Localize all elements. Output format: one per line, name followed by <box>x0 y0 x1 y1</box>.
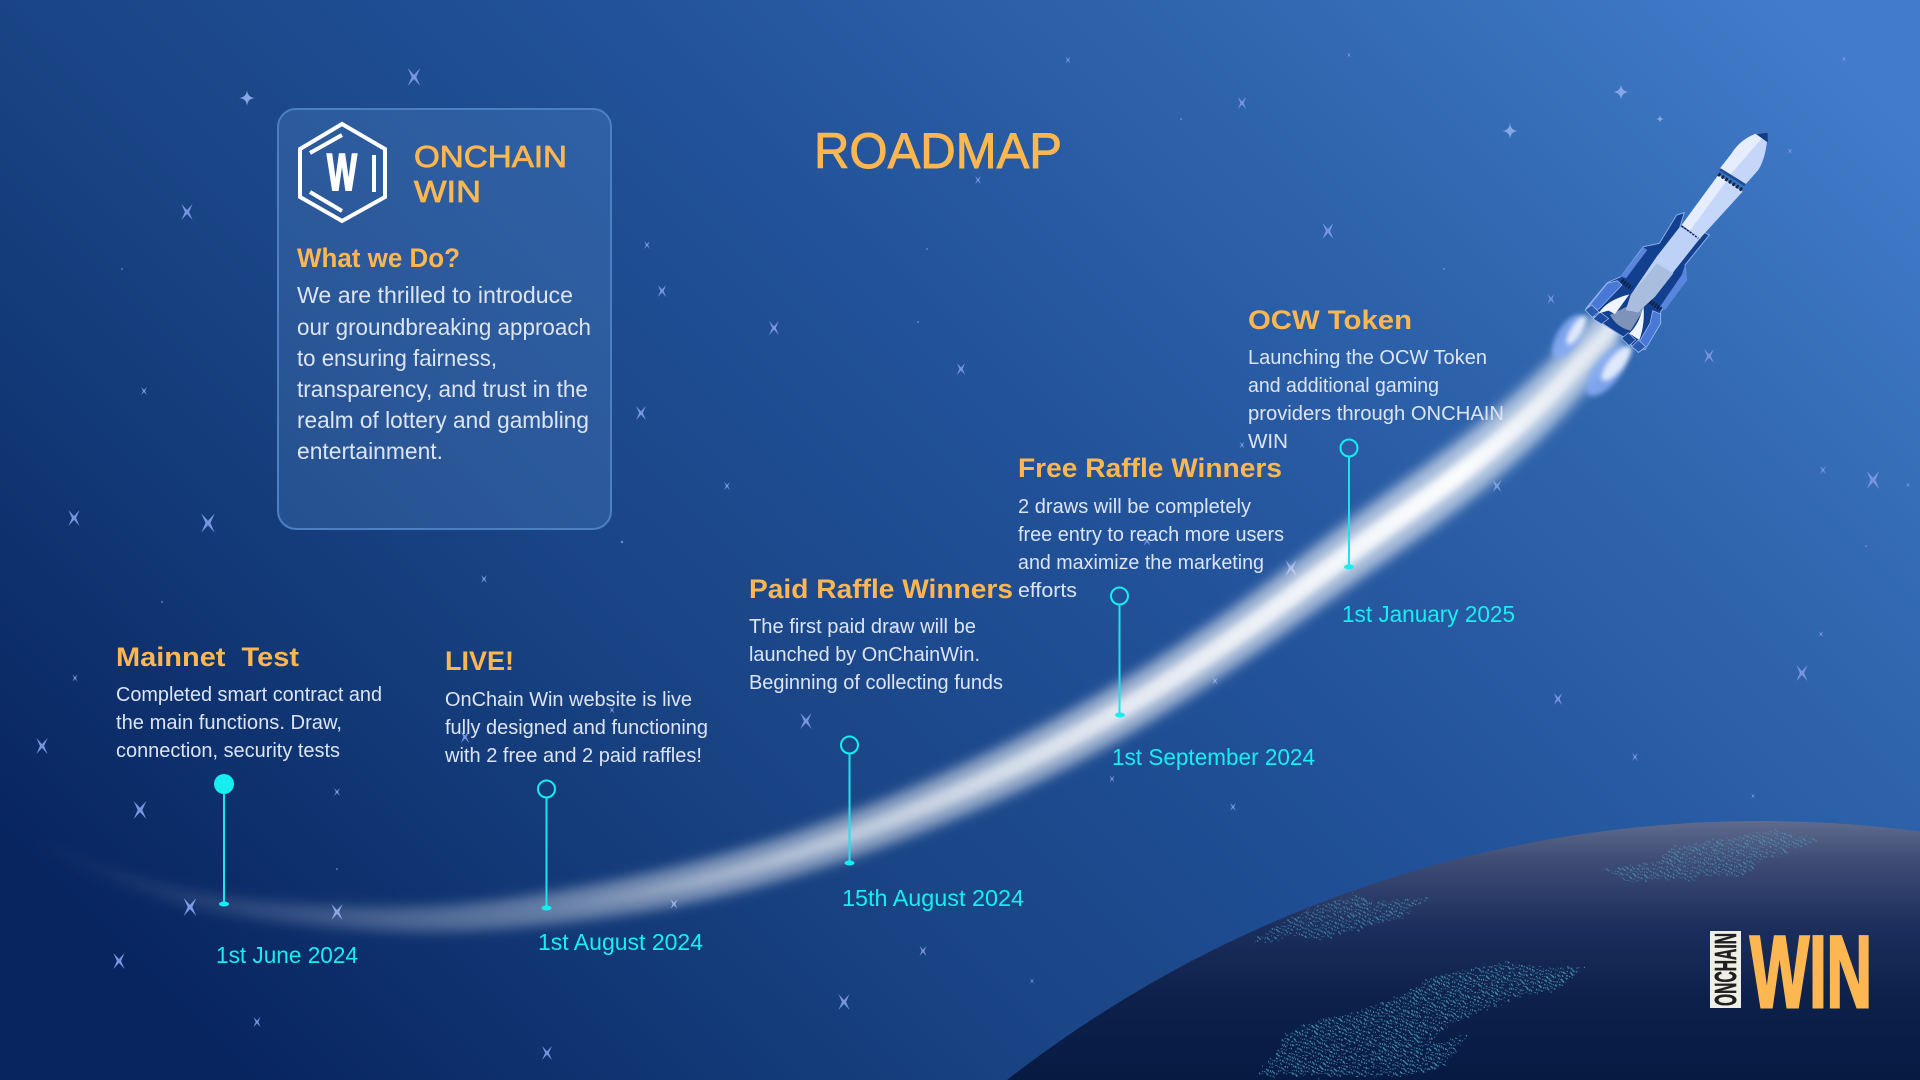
milestone: OCW Token: providers through ONCHAIN <box>1248 403 1504 425</box>
milestone: Free Raffle Winners: efforts <box>1018 580 1077 602</box>
description: realm of lottery and gambling <box>297 407 589 433</box>
icon: hexagon W logo <box>300 124 385 221</box>
milestone: LIVE: OnChain Win website is live <box>445 689 692 711</box>
icon: rocket <box>1545 133 1768 403</box>
rocket trail <box>13 290 1620 932</box>
left booster panels <box>1621 247 1647 278</box>
lower core <box>1626 227 1700 312</box>
continent: lower <box>1256 962 1586 1076</box>
continent: middle <box>1249 895 1430 945</box>
milestone: OCW Token: WIN <box>1248 431 1288 453</box>
milestone: Paid Raffle Winners <box>749 574 1024 911</box>
nose <box>1720 133 1768 185</box>
description: transparency, and trust in the <box>297 376 588 402</box>
band and windows <box>1720 169 1745 185</box>
brand name <box>414 139 567 209</box>
milestone: LIVE: fully designed and functioning <box>445 717 708 739</box>
milestone: Free Raffle Winners <box>1018 453 1315 770</box>
milestone: LIVE <box>444 646 708 955</box>
logo: ONCHAIN WIN <box>1708 915 1872 1029</box>
milestone: Free Raffle Winners: free entry to reach more users <box>1018 524 1284 546</box>
milestone: LIVE: 1st August 2024 <box>538 929 703 955</box>
booster silhouette <box>1586 213 1709 352</box>
milestone: Paid Raffle Winners: Beginning of collecting funds <box>749 672 1003 694</box>
milestone: LIVE: with 2 free and 2 paid raffles! <box>444 745 702 767</box>
milestone: LIVE: LIVE! <box>445 646 514 676</box>
flames <box>1545 309 1637 403</box>
milestone: OCW Token <box>1248 305 1515 627</box>
milestone: Paid Raffle Winners: launched by OnChainWin. <box>749 644 980 666</box>
heading: what we do: What we Do? <box>297 243 460 273</box>
milestone: Paid Raffle Winners: 15th August 2024 <box>842 885 1024 911</box>
milestone: Paid Raffle Winners: The first paid draw will be <box>749 616 976 638</box>
description: our groundbreaking approach <box>297 314 591 340</box>
description: We are thrilled to introduce <box>297 282 573 308</box>
milestone: Mainnet Test: 1st June 2024 <box>216 942 358 968</box>
description: to ensuring fairness, <box>297 345 497 371</box>
panel: what we do <box>278 109 611 529</box>
milestone: Mainnet Test: connection, security tests <box>116 740 340 762</box>
brand name: WIN <box>414 174 481 209</box>
brand name: ONCHAIN <box>414 139 567 174</box>
milestone: Paid Raffle Winners: Paid Raffle Winners <box>749 574 1013 604</box>
white fins <box>1599 294 1629 314</box>
milestone: OCW Token: 1st January 2025 <box>1342 601 1515 627</box>
milestone: Free Raffle Winners: and maximize the marketing <box>1018 552 1264 574</box>
milestone: Free Raffle Winners: 2 draws will be completely <box>1018 496 1251 518</box>
milestone: Mainnet Test <box>116 642 382 968</box>
milestone: Mainnet Test: Mainnet Test <box>116 642 299 672</box>
right booster panels <box>1660 265 1687 310</box>
milestone: OCW Token: OCW Token <box>1248 305 1412 335</box>
milestone: OCW Token: Launching the OCW Token <box>1248 347 1487 369</box>
continent: upper right <box>1604 829 1820 883</box>
core nozzle <box>1610 307 1643 331</box>
icon: hexagon W logo: W <box>327 144 358 202</box>
description: entertainment. <box>297 438 443 464</box>
milestone: Free Raffle Winners: Free Raffle Winners <box>1018 453 1282 483</box>
logo: ONCHAIN WIN: ONCHAIN <box>1708 933 1743 1006</box>
upper stage <box>1682 175 1743 238</box>
milestone: Mainnet Test: Completed smart contract and <box>116 684 382 706</box>
milestone: OCW Token: and additional gaming <box>1248 375 1439 397</box>
title: ROADMAP <box>814 123 1062 179</box>
milestone: Free Raffle Winners: 1st September 2024 <box>1112 744 1315 770</box>
description <box>297 282 591 464</box>
globe <box>1007 821 1920 1080</box>
milestone: Mainnet Test: the main functions. Draw, <box>116 712 342 734</box>
